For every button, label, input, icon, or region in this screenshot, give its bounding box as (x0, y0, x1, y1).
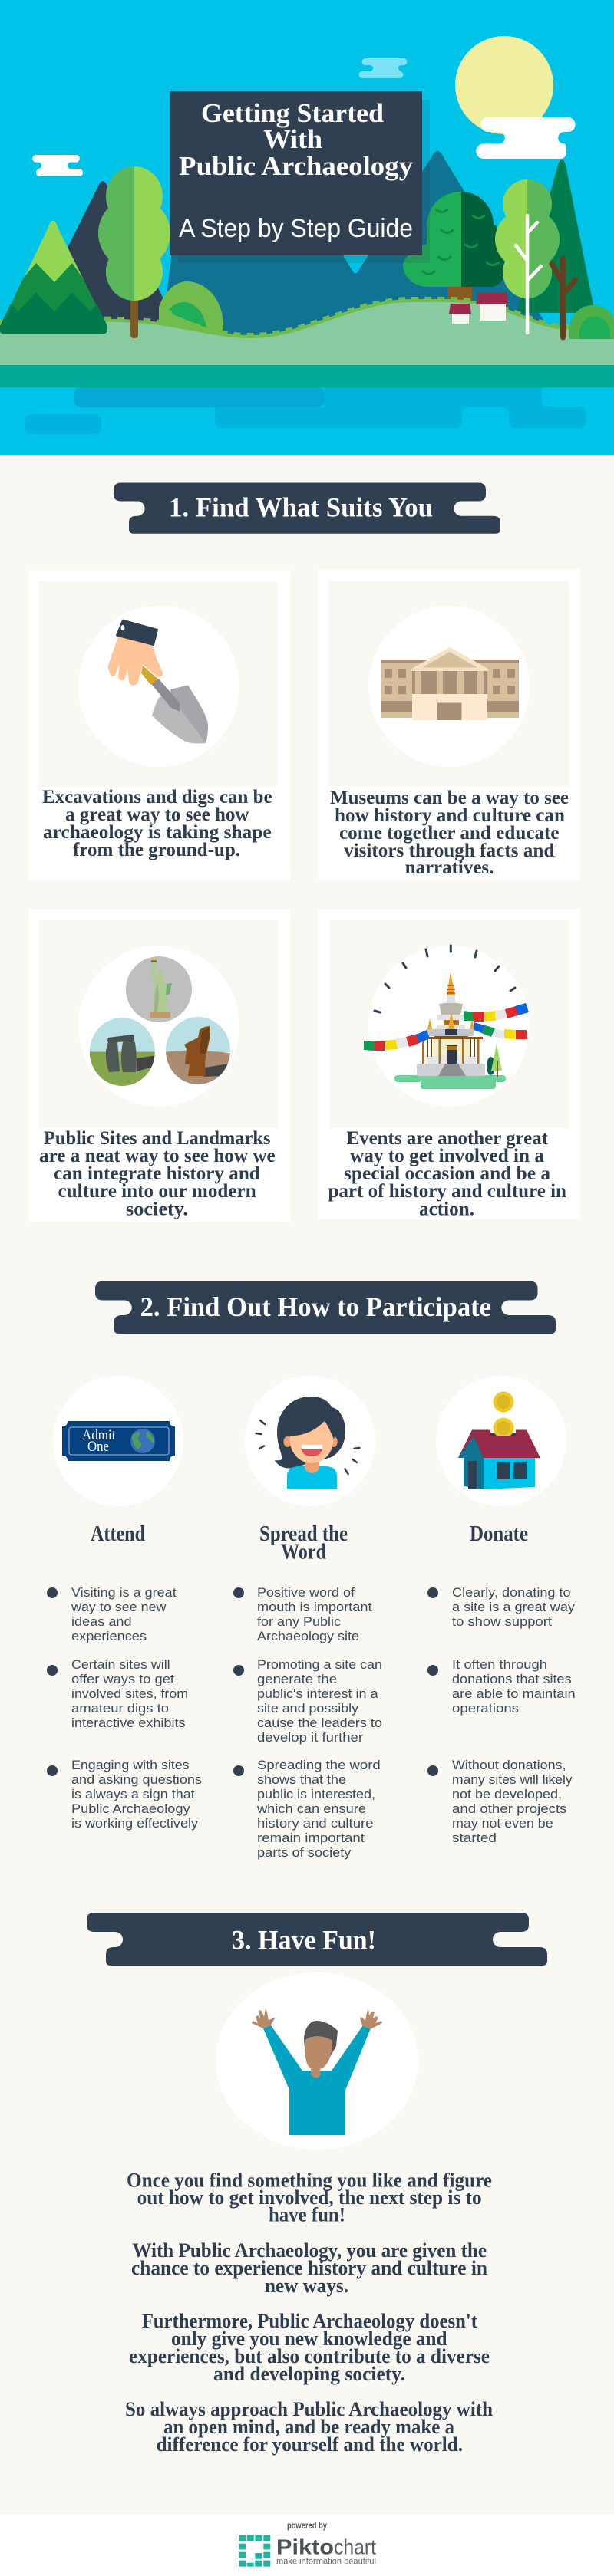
bullet list: attend: ideas and (71, 1614, 132, 1629)
bullet list: donate: donations that sites (452, 1672, 572, 1686)
text: museums: how history and culture can (335, 805, 565, 826)
panel: public sites (28, 909, 290, 1222)
bullet list: donate: a site is a great way (452, 1600, 576, 1614)
text: public sites: Public Sites and Landmarks (44, 1128, 271, 1149)
footer (0, 2515, 614, 2576)
icon: rays (375, 946, 515, 1012)
heading banner: section 2: 2. Find Out How to Participate (140, 1291, 491, 1322)
icon: woman (256, 1397, 359, 1489)
bullet list: attend: amateur digs to (71, 1701, 169, 1716)
heading banner: section 1 (114, 483, 500, 534)
logo: piktochart mark (239, 2535, 270, 2567)
icon: left green mountain (0, 221, 107, 334)
text: public sites: society. (126, 1199, 188, 1219)
icon: piggy-bank house (458, 1391, 540, 1489)
icon: large house (476, 292, 508, 321)
text: closing message 3: experiences, but also contribute to a diverse (129, 2345, 490, 2367)
heading: spread the word: Spread the (259, 1522, 348, 1546)
text: excavations: a great way to see how (65, 804, 249, 825)
text: closing message 2: new ways. (265, 2275, 348, 2297)
text: closing message 3: Furthermore, Public Archaeology doesn't (142, 2310, 477, 2332)
bullet list: spread the word: public's interest in a (257, 1686, 378, 1701)
bullet list: spread the word (233, 1585, 382, 1860)
text: closing message 4: So always approach Public Archaeology with (125, 2398, 494, 2420)
heading banner: section 2 (95, 1281, 556, 1334)
text: closing message 4: difference for yourself and the world. (157, 2433, 463, 2456)
text: events: way to get involved in a (350, 1146, 544, 1166)
text: closing message 3: and developing society. (213, 2363, 405, 2385)
title box shadow (178, 100, 430, 263)
bullet list: spread the word: shows that the (257, 1772, 346, 1787)
bullet list: donate: Without donations, (452, 1758, 566, 1772)
text: closing message 1 (127, 2170, 492, 2226)
heading banner: section 1: 1. Find What Suits You (169, 492, 433, 523)
bullet list: donate: It often through (452, 1657, 547, 1672)
bullet list: attend: way to see new (71, 1600, 167, 1614)
text: museums (330, 788, 569, 878)
bullet list: donate: Clearly, donating to (452, 1585, 571, 1600)
text: excavations: archaeology is taking shape (43, 822, 272, 843)
title: With (263, 124, 322, 154)
text: closing message 3 (129, 2310, 490, 2385)
bullet list: attend: is always a sign that (71, 1787, 195, 1801)
text: closing message 1: Once you find something you like and figure (127, 2170, 492, 2192)
text: museums: come together and educate (339, 823, 560, 844)
bullet list: attend: experiences (71, 1629, 147, 1643)
icon: museum (381, 647, 519, 720)
text: museums: narratives. (405, 857, 494, 878)
bullet list: donate: and other projects (452, 1801, 566, 1816)
bullet list: attend: Certain sites will (71, 1657, 170, 1672)
text: excavations: from the ground-up. (73, 840, 240, 860)
bullet list: spread the word: public is interested, (257, 1787, 375, 1801)
text: public sites: can integrate history and (54, 1163, 260, 1184)
icon: big tree crown (403, 192, 507, 287)
bullet list: donate: to show support (452, 1614, 552, 1629)
text: closing message 1: have fun! (269, 2204, 345, 2226)
column: spread the word (233, 1376, 382, 1860)
icon: moai (164, 1016, 233, 1086)
illustration: person cheering (216, 1972, 418, 2150)
column: attend (47, 1376, 202, 1831)
hill outline (0, 298, 614, 338)
bullet list: spread the word: generate the (257, 1672, 337, 1686)
bullet list: attend: is working effectively (71, 1816, 199, 1831)
icon: trowel in hand (108, 620, 208, 744)
icon: shirt (263, 2025, 371, 2135)
text: events: Events are another great (347, 1128, 549, 1149)
icon: ticket: Admit (82, 1427, 116, 1443)
column: donate (427, 1376, 576, 1845)
bullet list: spread the word: develop it further (257, 1730, 363, 1745)
text: public sites (39, 1128, 276, 1219)
bullet list: spread the word: for any Public (257, 1614, 342, 1629)
text: powered by: powered by (287, 2520, 327, 2531)
bullet list: donate: operations (452, 1701, 519, 1716)
title box (170, 91, 422, 255)
icon: big tree trunk (447, 287, 472, 301)
text: events: special occasion and be a (344, 1163, 551, 1184)
teal band (0, 365, 614, 388)
bullet list: attend: Engaging with sites (71, 1758, 190, 1772)
heading banner: section 3 (87, 1913, 547, 1966)
subtitle: A Step by Step Guide (179, 214, 413, 243)
icon: ticket (62, 1421, 175, 1461)
panel: museums (319, 569, 580, 880)
hero illustration (0, 0, 614, 455)
icon: left tree (98, 166, 170, 338)
icon: ticket: One (87, 1439, 109, 1455)
text: public sites: are a neat way to see how we (39, 1146, 276, 1166)
dark mountain (68, 181, 163, 322)
icon: big white cloud (476, 117, 576, 159)
heading: spread the word (259, 1522, 348, 1564)
logo: piktochart wordmark (276, 2535, 376, 2566)
bullet list: attend: interactive exhibits (71, 1716, 186, 1730)
hill (0, 302, 614, 365)
bullet list: attend: Visiting is a great (71, 1585, 177, 1600)
text: museums: Museums can be a way to see (330, 788, 569, 808)
icon: hair (304, 2021, 338, 2057)
bullet list: spread the word: Promoting a site can (257, 1657, 382, 1672)
blue mountains (161, 151, 556, 341)
dark green mountain (517, 160, 595, 313)
icon: light cloud (359, 58, 407, 78)
icon: right bush (569, 305, 614, 339)
heading: spread the word: Word (281, 1540, 326, 1564)
heading banner: section 3: 3. Have Fun! (232, 1925, 376, 1956)
text: closing message 4: an open mind, and be ready make a (163, 2416, 454, 2438)
logo: piktochart wordmark: make information beautiful (276, 2555, 376, 2566)
text: closing message 2: With Public Archaeology, you are given the (132, 2239, 487, 2262)
bullet list: spread the word: history and culture (257, 1816, 373, 1831)
text: closing message 1: out how to get involved, the next step is to (137, 2186, 482, 2209)
logo: piktochart wordmark: chart (334, 2535, 376, 2559)
text: closing message 2 (131, 2239, 488, 2297)
bullet list: donate: are able to maintain (452, 1686, 576, 1701)
text: closing message 3: only give you new knowledge and (171, 2328, 447, 2350)
bullet list: attend: and asking questions (71, 1772, 202, 1787)
text: events (328, 1128, 566, 1219)
logo: piktochart wordmark: Pikto (276, 2535, 334, 2559)
text: events: part of history and culture in (328, 1181, 566, 1202)
bullet list: donate: many sites will likely (452, 1772, 573, 1787)
text: excavations (42, 787, 272, 860)
icon: hands (252, 2008, 382, 2029)
bullet list: spread the word: Spreading the word (257, 1758, 381, 1772)
water reflections (25, 387, 586, 434)
text: closing message 4 (125, 2398, 494, 2456)
bullet list: spread the word: site and possibly (257, 1701, 359, 1716)
title: Public Archaeology (179, 151, 414, 181)
bullet list: spread the word: which can ensure (256, 1801, 366, 1816)
text: public sites: culture into our modern (58, 1181, 256, 1202)
bullet list: spread the word: Positive word of (257, 1585, 355, 1600)
text: events: action. (419, 1199, 474, 1219)
icon: temple (394, 972, 506, 1089)
bullet list: attend: Public Archaeology (71, 1801, 190, 1816)
icon: sun (455, 36, 553, 134)
text: museums: visitors through facts and (344, 841, 554, 861)
bullet list: spread the word: cause the leaders to (257, 1716, 382, 1730)
icon: left white cloud (32, 155, 83, 176)
bullet list: attend: offer ways to get (71, 1672, 174, 1686)
icon: brown tree (552, 258, 576, 337)
bullet list: attend (47, 1585, 202, 1831)
bullet list: donate: may not even be (452, 1816, 553, 1831)
bullet list: spread the word: Archaeology site (257, 1629, 359, 1643)
panel: events (319, 909, 580, 1219)
bullet list: spread the word: mouth is important (257, 1600, 372, 1614)
bullet list: spread the word: remain important (257, 1831, 365, 1845)
icon: face (305, 2036, 332, 2078)
bullet list: attend: involved sites, from (71, 1686, 188, 1701)
icon: statue of liberty (126, 956, 192, 1022)
text: closing message 2: chance to experience history and culture in (131, 2257, 488, 2279)
heading: donate: Donate (470, 1522, 528, 1546)
icon: stonehenge (88, 1016, 157, 1087)
icon: light tree (495, 179, 560, 333)
bullet list: spread the word: parts of society (257, 1845, 352, 1860)
bullet list: donate (427, 1585, 576, 1845)
bullet list: donate: not be developed, (452, 1787, 562, 1801)
text: excavations: Excavations and digs can be (42, 787, 272, 808)
heading: attend: Attend (91, 1522, 145, 1546)
panel: excavations (28, 571, 290, 880)
title: Getting Started (201, 98, 385, 128)
title (179, 98, 414, 181)
bullet list: donate: started (452, 1831, 497, 1845)
icon: left bush (159, 281, 223, 333)
icon: prayer flags (364, 1003, 529, 1051)
icon: small house (449, 304, 471, 324)
